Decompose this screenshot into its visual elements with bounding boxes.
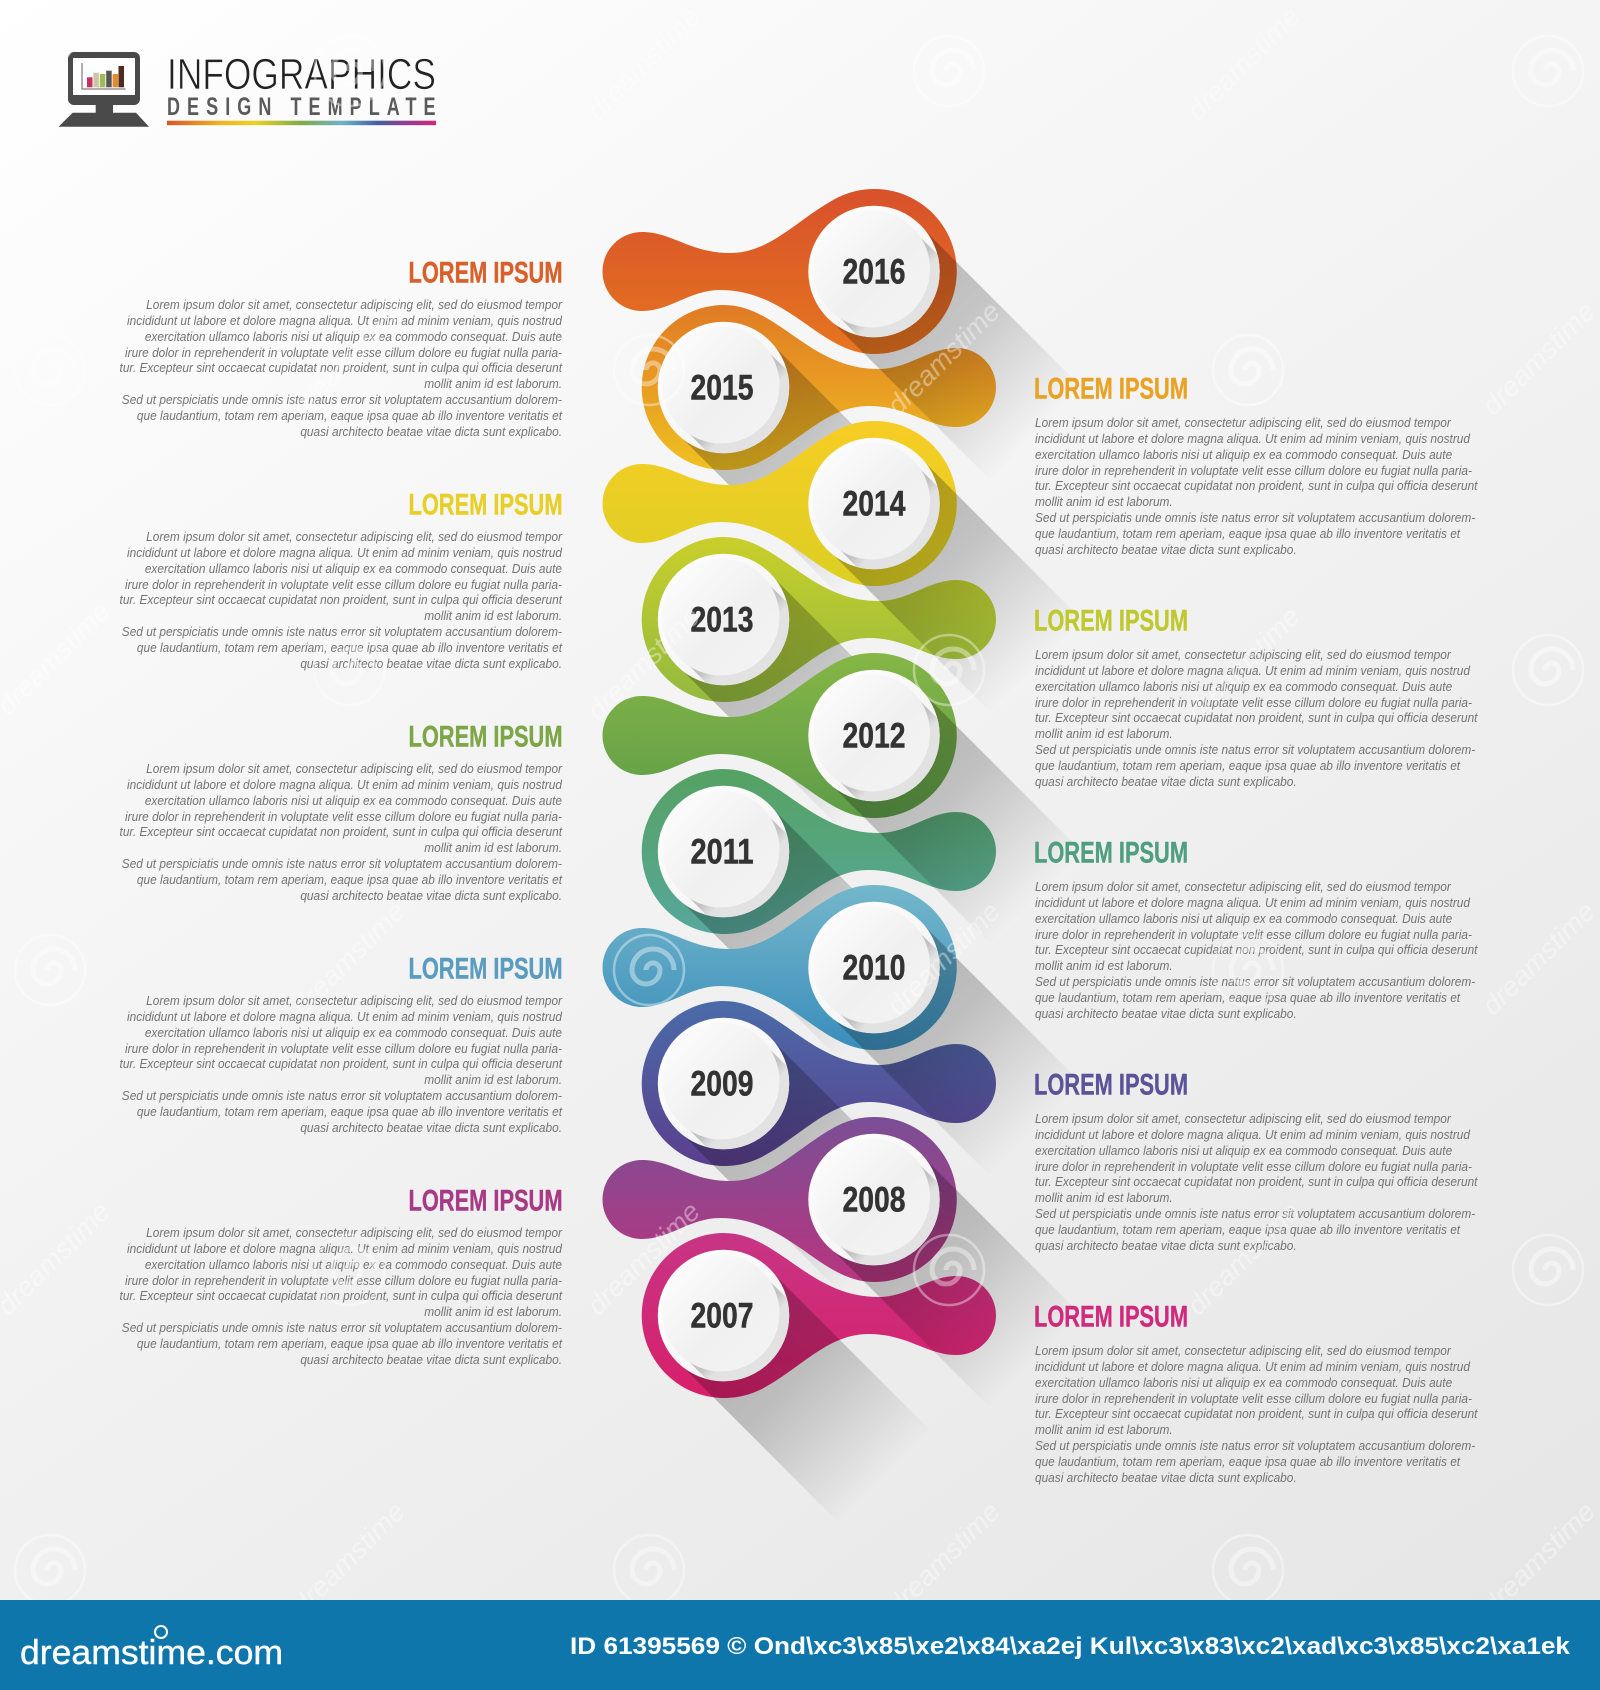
text block 2014: incididunt ut labore et dolore magna aliqua. Ut enim ad minim veniam, quis nostrud xyxy=(127,545,562,560)
year badge 2016 xyxy=(808,206,992,390)
text block 2013 xyxy=(1035,647,1478,789)
text block 2013: irure dolor in reprehenderit in voluptate velit esse cillum dolore eu fugiat nulla paria- xyxy=(1035,695,1472,710)
text block 2014: que laudantium, totam rem aperiam, eaque ipsa quae ab illo inventore veritatis et xyxy=(137,640,562,655)
text block 2011: exercitation ullamco laboris nisi ut aliquip ex ea commodo consequat. Duis aute xyxy=(1035,911,1452,926)
text block 2016: Sed ut perspiciatis unde omnis iste natus error sit voluptatem accusantium dolorem- xyxy=(122,392,562,407)
text block 2014: Sed ut perspiciatis unde omnis iste natus error sit voluptatem accusantium dolorem- xyxy=(122,624,562,639)
heading 2011: LOREM IPSUM xyxy=(1034,836,1188,870)
text block 2015: incididunt ut labore et dolore magna aliqua. Ut enim ad minim veniam, quis nostrud xyxy=(1035,431,1470,446)
year badge 2015 xyxy=(658,322,842,506)
text block 2007: Lorem ipsum dolor sit amet, consectetur adipiscing elit, sed do eiusmod tempor xyxy=(1035,1343,1451,1358)
text block 2016 xyxy=(120,297,562,439)
text block 2012 xyxy=(120,761,562,903)
text block 2013: exercitation ullamco laboris nisi ut aliquip ex ea commodo consequat. Duis aute xyxy=(1035,679,1452,694)
stock watermark overlay: dreamstime xyxy=(881,896,1006,1021)
text block 2014: Lorem ipsum dolor sit amet, consectetur adipiscing elit, sed do eiusmod tempor xyxy=(146,529,562,544)
long shadow 2013 xyxy=(678,574,932,828)
ribbon 2007 xyxy=(642,1233,996,1398)
text block 2013: incididunt ut labore et dolore magna aliqua. Ut enim ad minim veniam, quis nostrud xyxy=(1035,663,1470,678)
text block 2011: quasi architecto beatae vitae dicta sunt explicabo. xyxy=(1035,1006,1297,1021)
year badge 2010 xyxy=(808,902,992,1086)
year badge 2008: 2008 xyxy=(842,1180,906,1220)
stock watermark overlay: dreamstime xyxy=(581,1,706,126)
text block 2012: irure dolor in reprehenderit in voluptate velit esse cillum dolore eu fugiat nulla paria- xyxy=(125,809,562,824)
heading 2016: LOREM IPSUM xyxy=(408,256,562,290)
text block 2012: tur. Excepteur sint occaecat cupidatat non proident, sunt in culpa qui officia deserunt xyxy=(120,824,562,839)
stock watermark overlay: dreamstime xyxy=(1181,601,1306,726)
text block 2016: que laudantium, totam rem aperiam, eaque ipsa quae ab illo inventore veritatis et xyxy=(137,408,562,423)
text block 2010: tur. Excepteur sint occaecat cupidatat non proident, sunt in culpa qui officia deserunt xyxy=(120,1056,562,1071)
text block 2009: mollit anim id est laborum. xyxy=(1035,1190,1173,1205)
text block 2009: que laudantium, totam rem aperiam, eaque ipsa quae ab illo inventore veritatis et xyxy=(1035,1222,1460,1237)
year badge 2015: 2015 xyxy=(690,368,754,408)
text block 2016: Lorem ipsum dolor sit amet, consectetur adipiscing elit, sed do eiusmod tempor xyxy=(146,297,562,312)
year badge 2009 xyxy=(658,1018,842,1202)
ribbon 2014 xyxy=(602,421,957,586)
long shadow 2014 xyxy=(828,458,1083,712)
title: INFOGRAPHICS xyxy=(167,50,436,99)
ribbon 2016 xyxy=(602,189,957,354)
footer brand: dreamstime.com xyxy=(20,1634,283,1672)
year badge 2013: 2013 xyxy=(690,600,754,640)
stock watermark overlay: dreamstime xyxy=(1476,296,1600,421)
heading 2013: LOREM IPSUM xyxy=(1034,604,1188,638)
text block 2015: quasi architecto beatae vitae dicta sunt explicabo. xyxy=(1035,542,1297,557)
ribbon 2012 xyxy=(602,653,957,818)
text block 2007 xyxy=(1035,1343,1478,1485)
text block 2012: que laudantium, totam rem aperiam, eaque ipsa quae ab illo inventore veritatis et xyxy=(137,872,562,887)
text block 2014: mollit anim id est laborum. xyxy=(424,608,562,623)
icon: computer monitor with bar chart xyxy=(58,52,149,127)
text block 2008: mollit anim id est laborum. xyxy=(424,1304,562,1319)
year badge 2014: 2014 xyxy=(842,484,906,524)
text block 2012: quasi architecto beatae vitae dicta sunt explicabo. xyxy=(300,888,562,903)
year badge 2014 xyxy=(808,438,992,622)
text block 2015: que laudantium, totam rem aperiam, eaque ipsa quae ab illo inventore veritatis et xyxy=(1035,526,1460,541)
text block 2015: Sed ut perspiciatis unde omnis iste natus error sit voluptatem accusantium dolorem- xyxy=(1035,510,1475,525)
text block 2010: Sed ut perspiciatis unde omnis iste natus error sit voluptatem accusantium dolorem- xyxy=(122,1088,562,1103)
text block 2007: que laudantium, totam rem aperiam, eaque ipsa quae ab illo inventore veritatis et xyxy=(1035,1454,1460,1469)
year badge 2011: 2011 xyxy=(690,832,753,872)
text block 2010: irure dolor in reprehenderit in voluptate velit esse cillum dolore eu fugiat nulla paria- xyxy=(125,1041,562,1056)
text block 2012: mollit anim id est laborum. xyxy=(424,840,562,855)
heading 2012: LOREM IPSUM xyxy=(408,720,562,754)
text block 2010: exercitation ullamco laboris nisi ut aliquip ex ea commodo consequat. Duis aute xyxy=(145,1025,562,1040)
ribbon 2015 xyxy=(642,305,996,470)
long shadow 2015 xyxy=(678,342,932,596)
text block 2016: tur. Excepteur sint occaecat cupidatat non proident, sunt in culpa qui officia deserunt xyxy=(120,360,562,375)
text block 2015: exercitation ullamco laboris nisi ut aliquip ex ea commodo consequat. Duis aute xyxy=(1035,447,1452,462)
text block 2009: irure dolor in reprehenderit in voluptate velit esse cillum dolore eu fugiat nulla paria- xyxy=(1035,1159,1472,1174)
ribbon 2009 xyxy=(642,1001,996,1166)
stock watermark overlay: dreamstime xyxy=(286,296,411,421)
text block 2007: exercitation ullamco laboris nisi ut aliquip ex ea commodo consequat. Duis aute xyxy=(1035,1375,1452,1390)
text block 2011 xyxy=(1035,879,1478,1021)
text block 2008: tur. Excepteur sint occaecat cupidatat non proident, sunt in culpa qui officia deserunt xyxy=(120,1288,562,1303)
year badge 2013 xyxy=(658,554,842,738)
rainbow underline xyxy=(167,121,436,125)
text block 2016: mollit anim id est laborum. xyxy=(424,376,562,391)
text block 2014: quasi architecto beatae vitae dicta sunt explicabo. xyxy=(300,656,562,671)
text block 2014: irure dolor in reprehenderit in voluptate velit esse cillum dolore eu fugiat nulla paria- xyxy=(125,577,562,592)
text block 2008 xyxy=(120,1225,562,1367)
text block 2010: que laudantium, totam rem aperiam, eaque ipsa quae ab illo inventore veritatis et xyxy=(137,1104,562,1119)
stock watermark overlay: dreamstime xyxy=(1181,1,1306,126)
heading 2007: LOREM IPSUM xyxy=(1034,1300,1188,1334)
heading 2010: LOREM IPSUM xyxy=(408,952,562,986)
text block 2011: que laudantium, totam rem aperiam, eaque ipsa quae ab illo inventore veritatis et xyxy=(1035,990,1460,1005)
ribbon 2008 xyxy=(602,1117,957,1282)
text block 2009: exercitation ullamco laboris nisi ut aliquip ex ea commodo consequat. Duis aute xyxy=(1035,1143,1452,1158)
ribbon 2013 xyxy=(642,537,996,702)
year badge 2012: 2012 xyxy=(842,716,906,756)
long shadow 2011 xyxy=(678,806,932,1060)
text block 2008: Sed ut perspiciatis unde omnis iste natus error sit voluptatem accusantium dolorem- xyxy=(122,1320,562,1335)
text block 2007: tur. Excepteur sint occaecat cupidatat non proident, sunt in culpa qui officia deserunt xyxy=(1035,1406,1477,1421)
text block 2016: exercitation ullamco laboris nisi ut aliquip ex ea commodo consequat. Duis aute xyxy=(145,329,562,344)
text block 2016: incididunt ut labore et dolore magna aliqua. Ut enim ad minim veniam, quis nostrud xyxy=(127,313,562,328)
text block 2008: irure dolor in reprehenderit in voluptate velit esse cillum dolore eu fugiat nulla paria- xyxy=(125,1273,562,1288)
year badge 2007: 2007 xyxy=(690,1296,754,1336)
stock watermark overlay: dreamstime xyxy=(1181,1196,1306,1321)
text block 2007: incididunt ut labore et dolore magna aliqua. Ut enim ad minim veniam, quis nostrud xyxy=(1035,1359,1470,1374)
stock watermark overlay: dreamstime xyxy=(581,601,706,726)
text block 2008: quasi architecto beatae vitae dicta sunt explicabo. xyxy=(300,1352,562,1367)
text block 2015 xyxy=(1035,415,1478,557)
subtitle: DESIGN TEMPLATE xyxy=(167,92,436,121)
text block 2009: Lorem ipsum dolor sit amet, consectetur adipiscing elit, sed do eiusmod tempor xyxy=(1035,1111,1451,1126)
text block 2011: mollit anim id est laborum. xyxy=(1035,958,1173,973)
text block 2008: Lorem ipsum dolor sit amet, consectetur adipiscing elit, sed do eiusmod tempor xyxy=(146,1225,562,1240)
text block 2009: tur. Excepteur sint occaecat cupidatat non proident, sunt in culpa qui officia deserunt xyxy=(1035,1174,1477,1189)
text block 2007: mollit anim id est laborum. xyxy=(1035,1422,1173,1437)
long shadow 2012 xyxy=(828,690,1083,944)
long shadow 2016 xyxy=(828,226,1083,480)
text block 2010 xyxy=(120,993,562,1135)
text block 2010: mollit anim id est laborum. xyxy=(424,1072,562,1087)
text block 2009: incididunt ut labore et dolore magna aliqua. Ut enim ad minim veniam, quis nostrud xyxy=(1035,1127,1470,1142)
text block 2008: que laudantium, totam rem aperiam, eaque ipsa quae ab illo inventore veritatis et xyxy=(137,1336,562,1351)
heading 2014: LOREM IPSUM xyxy=(408,488,562,522)
text block 2014: tur. Excepteur sint occaecat cupidatat non proident, sunt in culpa qui officia deserunt xyxy=(120,592,562,607)
ribbon 2010 xyxy=(602,885,957,1050)
text block 2015: mollit anim id est laborum. xyxy=(1035,494,1173,509)
text block 2011: irure dolor in reprehenderit in voluptate velit esse cillum dolore eu fugiat nulla paria- xyxy=(1035,927,1472,942)
stock watermark overlay: dreamstime xyxy=(881,296,1006,421)
text block 2015: Lorem ipsum dolor sit amet, consectetur adipiscing elit, sed do eiusmod tempor xyxy=(1035,415,1451,430)
text block 2008: incididunt ut labore et dolore magna aliqua. Ut enim ad minim veniam, quis nostrud xyxy=(127,1241,562,1256)
stock watermark overlay: dreamstime xyxy=(286,896,411,1021)
text block 2011: incididunt ut labore et dolore magna aliqua. Ut enim ad minim veniam, quis nostrud xyxy=(1035,895,1470,910)
text block 2009: quasi architecto beatae vitae dicta sunt explicabo. xyxy=(1035,1238,1297,1253)
text block 2014: exercitation ullamco laboris nisi ut aliquip ex ea commodo consequat. Duis aute xyxy=(145,561,562,576)
year badge 2007 xyxy=(658,1250,842,1434)
year badge 2012 xyxy=(808,670,992,854)
text block 2007: quasi architecto beatae vitae dicta sunt explicabo. xyxy=(1035,1470,1297,1485)
long shadow 2010 xyxy=(828,922,1083,1176)
text block 2015: tur. Excepteur sint occaecat cupidatat non proident, sunt in culpa qui officia deserunt xyxy=(1035,478,1477,493)
text block 2011: Sed ut perspiciatis unde omnis iste natus error sit voluptatem accusantium dolorem- xyxy=(1035,974,1475,989)
text block 2009: Sed ut perspiciatis unde omnis iste natus error sit voluptatem accusantium dolorem- xyxy=(1035,1206,1475,1221)
text block 2015: irure dolor in reprehenderit in voluptate velit esse cillum dolore eu fugiat nulla paria- xyxy=(1035,463,1472,478)
year badge 2008 xyxy=(808,1134,992,1318)
text block 2010: quasi architecto beatae vitae dicta sunt explicabo. xyxy=(300,1120,562,1135)
stock watermark overlay: dreamstime xyxy=(1476,896,1600,1021)
text block 2012: Sed ut perspiciatis unde omnis iste natus error sit voluptatem accusantium dolorem- xyxy=(122,856,562,871)
footer image id: ID 61395569 © Ond\xc3\x85\xe2\x84\xa2ej Kul\xc3\x83\xc2\xad\xc3\x85\xc2\xa1ek xyxy=(570,1633,1571,1660)
text block 2008: exercitation ullamco laboris nisi ut aliquip ex ea commodo consequat. Duis aute xyxy=(145,1257,562,1272)
text block 2011: tur. Excepteur sint occaecat cupidatat non proident, sunt in culpa qui officia deserunt xyxy=(1035,942,1477,957)
text block 2007: irure dolor in reprehenderit in voluptate velit esse cillum dolore eu fugiat nulla paria- xyxy=(1035,1391,1472,1406)
text block 2014 xyxy=(120,529,562,671)
heading 2008: LOREM IPSUM xyxy=(408,1184,562,1218)
year badge 2009: 2009 xyxy=(690,1064,754,1104)
year badge 2010: 2010 xyxy=(842,948,906,988)
year badge 2016: 2016 xyxy=(842,252,906,292)
text block 2011: Lorem ipsum dolor sit amet, consectetur adipiscing elit, sed do eiusmod tempor xyxy=(1035,879,1451,894)
heading 2009: LOREM IPSUM xyxy=(1034,1068,1188,1102)
text block 2013: mollit anim id est laborum. xyxy=(1035,726,1173,741)
text block 2013: Sed ut perspiciatis unde omnis iste natus error sit voluptatem accusantium dolorem- xyxy=(1035,742,1475,757)
text block 2013: tur. Excepteur sint occaecat cupidatat non proident, sunt in culpa qui officia deserunt xyxy=(1035,710,1477,725)
year badge 2011 xyxy=(658,786,842,970)
footer bar xyxy=(0,1600,1600,1690)
text block 2013: quasi architecto beatae vitae dicta sunt explicabo. xyxy=(1035,774,1297,789)
stock watermark overlay: dreamstime xyxy=(581,1196,706,1321)
text block 2013: que laudantium, totam rem aperiam, eaque ipsa quae ab illo inventore veritatis et xyxy=(1035,758,1460,773)
text block 2016: irure dolor in reprehenderit in voluptate velit esse cillum dolore eu fugiat nulla paria- xyxy=(125,345,562,360)
text block 2013: Lorem ipsum dolor sit amet, consectetur adipiscing elit, sed do eiusmod tempor xyxy=(1035,647,1451,662)
ribbon 2011 xyxy=(642,769,996,934)
text block 2012: exercitation ullamco laboris nisi ut aliquip ex ea commodo consequat. Duis aute xyxy=(145,793,562,808)
long shadow 2009 xyxy=(678,1038,932,1292)
text block 2012: incididunt ut labore et dolore magna aliqua. Ut enim ad minim veniam, quis nostrud xyxy=(127,777,562,792)
heading 2015: LOREM IPSUM xyxy=(1034,372,1188,406)
long shadow 2008 xyxy=(828,1154,1083,1408)
long shadow 2007 xyxy=(678,1270,932,1524)
text block 2007: Sed ut perspiciatis unde omnis iste natus error sit voluptatem accusantium dolorem- xyxy=(1035,1438,1475,1453)
text block 2010: Lorem ipsum dolor sit amet, consectetur adipiscing elit, sed do eiusmod tempor xyxy=(146,993,562,1008)
text block 2012: Lorem ipsum dolor sit amet, consectetur adipiscing elit, sed do eiusmod tempor xyxy=(146,761,562,776)
text block 2009 xyxy=(1035,1111,1478,1253)
text block 2010: incididunt ut labore et dolore magna aliqua. Ut enim ad minim veniam, quis nostrud xyxy=(127,1009,562,1024)
text block 2016: quasi architecto beatae vitae dicta sunt explicabo. xyxy=(300,424,562,439)
